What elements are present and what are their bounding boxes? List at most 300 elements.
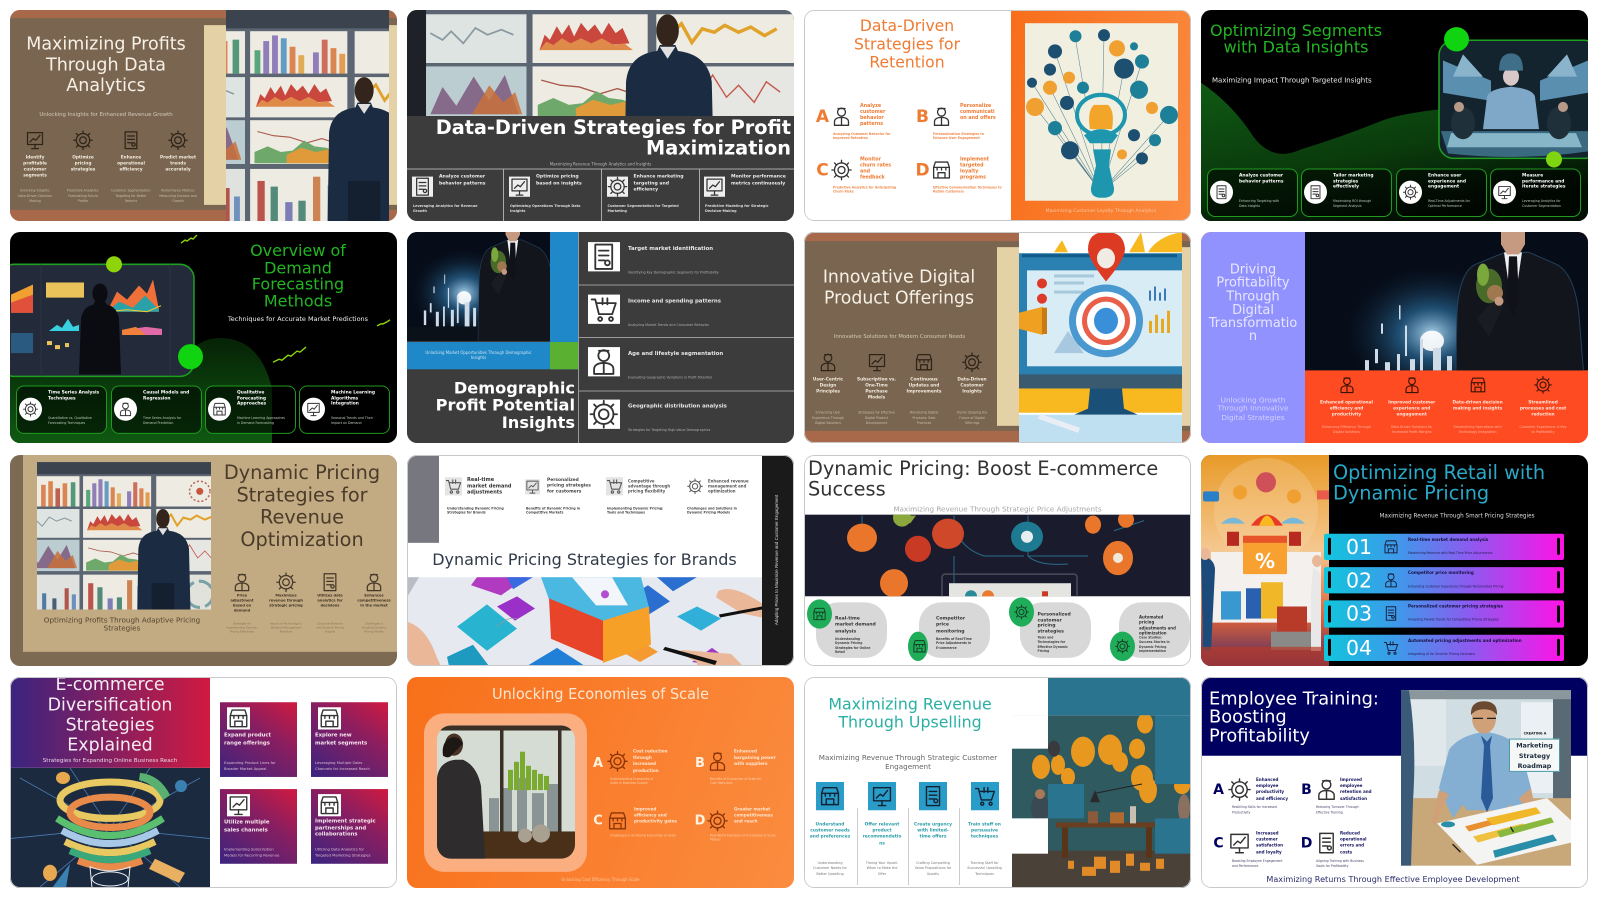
image caption subtitle: Strategies — [104, 624, 140, 633]
slide: E-commerce Diversification Strategies Explained — [10, 677, 397, 888]
title — [854, 17, 960, 72]
title: Demand — [264, 258, 332, 277]
item: monitor performance: Decision-Making — [705, 209, 737, 213]
item: measure performance: Customer Segmentation — [1522, 204, 1561, 208]
item: analyze behavior: Growth — [413, 209, 427, 213]
item A: Reskilling Skills for Increased — [1232, 805, 1277, 809]
item: analyze behavior: Enhancing Targeting with — [1239, 199, 1279, 203]
bar 03: 03 — [1346, 601, 1372, 626]
title: Overview of — [250, 241, 346, 260]
item: identify segments — [18, 132, 52, 202]
item: operational efficiency: productivity — [1332, 413, 1361, 418]
item: age segmentation: Age and lifestyle segmentation — [628, 351, 723, 357]
item: geographic distribution: Strategies for Targeting High-Value Demographics — [628, 428, 710, 432]
title: Forecasting — [252, 275, 344, 294]
accent circle: lime — [106, 256, 122, 272]
item: competitor monitoring: price — [936, 623, 949, 628]
item A: Productivity — [1232, 810, 1250, 814]
item: measure performance: Leveraging Analytics for — [1522, 199, 1561, 203]
item: competitor monitoring — [919, 597, 1019, 662]
label box: Marketing — [1516, 742, 1553, 750]
item: measure performance — [1490, 169, 1580, 216]
item B: on and offers — [960, 116, 996, 121]
item A: Scale in Business Growth — [610, 781, 648, 785]
item: time series — [16, 385, 106, 433]
item D: Models — [710, 838, 721, 842]
item: continuous updates: Monetizing Digital — [910, 411, 938, 415]
title: Optimization — [240, 528, 364, 551]
title — [1210, 21, 1382, 56]
title: Product Offerings — [824, 288, 974, 308]
item: optimize pricing: Profits — [78, 198, 88, 202]
item: maximize revenue: strategic pricing — [269, 603, 303, 607]
item: target market: Target market identification — [628, 246, 713, 252]
item C: Predictive Analytics for Anticipating — [833, 186, 896, 190]
tile: sales channels: Models for Recurring Revenue — [224, 853, 279, 857]
item: real-time demand: Retail — [835, 650, 845, 654]
tile: partnerships — [311, 789, 388, 864]
item: identify segments: profitable — [23, 161, 47, 166]
item: urgency: Value Propositions for — [915, 866, 951, 870]
item: subscription: One-Time — [865, 383, 888, 388]
title: Maximizing Revenue — [828, 694, 992, 713]
title: Dynamic Pricing — [224, 461, 380, 484]
item D: Effective Communication Techniques to — [933, 186, 1002, 190]
item B: with suppliers — [734, 761, 767, 766]
item: recommendations: recommendatio — [863, 835, 901, 840]
tile: partnerships: Targeted Marketing Strategies — [315, 853, 371, 857]
item B: Enhance User Engagement — [933, 136, 980, 140]
item: real-time demand: Real-time — [835, 617, 860, 622]
item: subscription: Purchase — [865, 389, 888, 395]
title: Dynamic Pricing — [1333, 481, 1489, 504]
item C: churn rates — [860, 163, 891, 169]
item: enhance marketing: Customer Segmentation for Targeted — [608, 204, 679, 208]
item: predict trends: Performance Metrics: — [161, 189, 195, 193]
item: data-driven decisions: Technology Integration — [1459, 430, 1496, 434]
item: subscription: Models — [868, 396, 885, 401]
item: subscription — [857, 354, 896, 424]
item B: Benefits of Economies of Scale for — [710, 777, 761, 781]
title: Driving — [1230, 262, 1276, 277]
item B: B — [1301, 782, 1312, 798]
item: automated adjustments: Case Studies: — [1139, 636, 1162, 640]
item: competitor monitoring: E-commerce — [936, 645, 957, 649]
item: real-time — [445, 477, 521, 516]
item C: and — [860, 170, 870, 175]
item: enhance experience: engagement — [1428, 185, 1459, 190]
tile: partnerships: Utilizing Data Analytics for — [315, 847, 364, 851]
title: Diversification — [48, 695, 172, 715]
item: recommendations: When to Make the — [867, 866, 897, 870]
title: Optimizing Segments — [1210, 21, 1382, 40]
item: time series: Quantitative vs. Qualitative — [48, 416, 92, 420]
item: analyze behavior: behavior patterns — [439, 181, 486, 186]
item: optimize pricing: Predictive Analytics: — [67, 189, 99, 193]
title — [1333, 463, 1583, 504]
tile: expand range: Expanding Product Lines for — [224, 760, 276, 764]
item A: Analyze — [860, 104, 881, 109]
item: competitiveness: Adopting Dynamic — [362, 626, 386, 630]
slide: Unlocking Economies of Scale: Greater market — [734, 806, 770, 811]
item: user-centric design: User-Centric — [813, 377, 843, 382]
subtitle: Techniques for Accurate Market Predictions — [228, 315, 368, 323]
item: analyze behavior: Analyze customer — [1239, 174, 1283, 179]
slide: Unlocking Economies of Scale: bargaining power — [734, 755, 776, 760]
item: competitor monitoring: Benefits of Real-Time — [936, 637, 972, 641]
title: Profit Potential — [436, 396, 575, 415]
item: competitiveness — [353, 571, 395, 638]
item: data analytics: Consumer Behavior — [317, 622, 343, 626]
title: Explained — [67, 736, 153, 756]
item D: errors and — [1340, 843, 1364, 848]
slide: Employee Training: Boosting Profitability — [1201, 677, 1588, 888]
item: train staff: techniques — [971, 835, 998, 840]
item: competitor monitoring: monitoring — [936, 629, 965, 635]
image: man viewing data charts — [37, 462, 211, 609]
slide: Maximizing Profits Through Data Analytics — [10, 10, 397, 221]
item: maximize revenue — [265, 571, 307, 638]
item: competitiveness: in the market — [360, 603, 388, 607]
item: understand needs: and preferences — [810, 835, 850, 840]
label kicker: CREATING A — [1524, 732, 1546, 736]
label box: Roadmap — [1518, 762, 1551, 770]
item A — [1210, 777, 1305, 819]
bar 02 — [1324, 567, 1564, 593]
item: operational efficiency: Enhanced operational — [1320, 401, 1373, 406]
item C: customer — [1256, 837, 1278, 842]
item D: D — [1301, 836, 1312, 852]
vertical caption: Adapting Prices to Maximize Revenue and Customer Engagement — [774, 495, 779, 625]
item: revenue management — [687, 477, 763, 516]
item: qualitative approaches: Machine Learning Approaches — [237, 416, 285, 420]
teal backdrop block — [1048, 677, 1191, 715]
title: Innovative Digital — [823, 267, 975, 288]
item: monitor performance: Monitor performance — [731, 175, 786, 180]
item: continuous updates: Products: Best — [913, 416, 935, 420]
item: revenue management: management and — [708, 483, 746, 488]
subtitle: Through Innovative — [1218, 404, 1288, 413]
subtitle: Engagement — [885, 761, 931, 770]
item: customer experience: Data-Driven Solutions for — [1391, 425, 1433, 429]
label box — [1509, 739, 1560, 772]
item: time series: Time Series Analysis — [48, 391, 99, 396]
title — [436, 378, 575, 432]
item: price adjustment: Price — [237, 593, 247, 597]
title: Demographic — [454, 378, 575, 398]
item D: D — [915, 160, 930, 181]
item: optimize pricing — [67, 130, 99, 202]
item: data analytics: analytics for — [317, 598, 343, 602]
item D: loyalty — [960, 170, 978, 175]
item: real-time: Understanding Dynamic Pricing — [447, 506, 504, 511]
slide: Data-Driven Strategies for Profit Maximization — [407, 10, 794, 221]
item: customer experience: Increased Profit Margins — [1392, 430, 1432, 434]
item: urgency: Upsells — [927, 872, 939, 876]
slide: Dynamic Pricing: Boost E-commerce Success — [804, 455, 1191, 666]
item: data-driven insights — [956, 352, 988, 424]
item: price adjustment: based on — [233, 603, 251, 607]
item D: programs — [960, 176, 986, 181]
item: streamlined processes: Streamlined — [1528, 401, 1558, 406]
navy header band — [1201, 677, 1588, 756]
slide: Unlocking Economies of Scale: through — [633, 755, 652, 760]
item: streamlined processes: Customer Experience: A Key — [1520, 425, 1566, 429]
item B: retention and — [1340, 789, 1372, 795]
accent circle: bright green — [178, 344, 203, 369]
item: personalized pricing: pricing strategies — [547, 484, 591, 489]
item: optimize pricing: based on insights — [536, 181, 582, 186]
item: automated adjustments: Dynamic Pricing — [1139, 644, 1166, 648]
item: revenue management: Enhanced revenue — [708, 478, 749, 483]
item: competitive advantage: advantage through — [628, 483, 670, 488]
item: understand needs — [805, 778, 855, 885]
item: analyze behavior: behavior patterns — [1239, 179, 1283, 184]
item: train staff: Techniques — [975, 872, 994, 876]
item: recommendations: product — [872, 829, 892, 834]
item: income patterns: Income and spending patterns — [628, 299, 721, 305]
item C: C — [593, 813, 603, 828]
image frame — [424, 713, 587, 872]
slide: Unlocking Economies of Scale — [407, 677, 794, 888]
item: tailor marketing: Maximizing ROI through — [1333, 199, 1371, 203]
slide: Data-Driven Strategies for Retention — [804, 10, 1191, 221]
item: revenue management: Dynamic Pricing Models — [687, 511, 730, 515]
item D: Retain Customers — [933, 190, 964, 194]
green glow background — [10, 338, 272, 443]
item: personalized strategies: Technologies for — [1038, 640, 1065, 644]
item: personalized strategies — [1020, 597, 1120, 662]
image: monitor with target and pin — [1019, 232, 1182, 443]
item: machine learning: Impact on Demand — [331, 421, 362, 425]
item: time series: Forecasting Techniques — [48, 421, 85, 425]
item: optimize pricing: Forecasting Future — [68, 194, 98, 198]
item D: Aligning Training with Business — [1316, 859, 1364, 863]
item: maximize revenue: revenue through — [269, 598, 303, 602]
item C — [591, 817, 686, 860]
item: subscription: Development — [866, 420, 887, 424]
item: monitor performance — [704, 174, 786, 213]
image: orange balloons meeting room — [1012, 715, 1191, 888]
title — [10, 675, 210, 756]
item: recommendations: Offer relevant — [865, 822, 899, 827]
tile: partnerships: Implement strategic — [315, 818, 376, 824]
item A — [816, 103, 891, 140]
item: maximize revenue: Revenue Management — [271, 626, 301, 630]
item: continuous updates: Practices — [917, 420, 931, 424]
image: circuit of marketing icons — [804, 515, 1191, 596]
slide: Unlocking Economies of Scale: Enhanced — [734, 749, 757, 754]
tile: expand range: Expand product — [224, 733, 271, 739]
title: Strategies for — [236, 483, 368, 506]
item: streamlined processes — [1511, 375, 1575, 440]
item: continuous updates — [906, 354, 942, 424]
tile: sales channels — [220, 789, 297, 864]
title: Data-Driven — [860, 17, 954, 35]
subtitle: Maximizing Revenue Through Strategic Customer — [819, 753, 997, 762]
title: Methods — [264, 291, 332, 311]
item: train staff: Train staff on — [968, 822, 1001, 827]
item: predict trends: trends — [170, 161, 186, 166]
item C: and Performance — [1232, 864, 1258, 868]
slide: Unlocking Economies of Scale: efficiency and — [634, 812, 667, 818]
item: recommendations — [857, 778, 907, 885]
item: personalized strategies: Pricing — [1038, 649, 1049, 653]
item: data-driven insights: Offerings — [965, 420, 979, 424]
item: understand needs: Understand — [816, 822, 844, 827]
item B: communicati — [960, 110, 995, 115]
item D: D — [695, 813, 705, 828]
tile: partnerships: partnerships and — [315, 825, 366, 831]
item: identify segments: Data-Driven Decision — [18, 194, 52, 198]
item: personalized strategies: Effective Dynamic — [1038, 644, 1068, 648]
item: data-driven decisions: Data-driven decision — [1452, 401, 1503, 406]
item: competitiveness: Enhances — [364, 593, 384, 597]
subtitle: Maximizing Revenue Through Strategic Price Adjustments — [893, 504, 1102, 513]
title: Maximizing Profits — [26, 34, 186, 54]
item: analyze behavior — [1207, 169, 1298, 216]
footer subtitle: Maximizing Returns Through Effective Employee Development — [1266, 874, 1520, 884]
image: retail illustration: % — [1255, 549, 1275, 573]
item: data-driven insights: Trends Shaping the — [957, 411, 987, 415]
item: target market: Identifying Key Demographic Segments for Profitability — [628, 270, 719, 274]
bar 04: Automated pricing adjustments and optimization — [1408, 637, 1522, 642]
item D: Real-World Examples of Economies of Scale — [710, 833, 776, 838]
item: competitive advantage — [606, 477, 682, 516]
title: Data-Driven Strategies for Profit — [436, 116, 791, 139]
item: subscription: Subscription vs. — [857, 377, 896, 382]
bar 01 — [1324, 533, 1564, 560]
item: train staff — [960, 778, 1010, 885]
item: operational efficiency — [1314, 375, 1378, 440]
item: competitive advantage: Tools and Techniques — [607, 511, 645, 515]
bar 02: Enhancing Customer Experience through Personalized Pricing — [1408, 584, 1504, 588]
item: real-time demand: Understanding — [835, 637, 860, 641]
item: income patterns: Analyzing Market Trends and Consumer Behavior — [628, 323, 709, 327]
item: data analytics — [309, 571, 351, 638]
item: automated adjustments: pricing — [1139, 620, 1154, 625]
item B: B — [695, 756, 705, 771]
item: subscription: Digital Product — [865, 416, 888, 420]
item: user-centric design: Digital Solutions — [815, 420, 841, 424]
tile: new segments: market segments — [315, 741, 367, 747]
title: Through — [1226, 289, 1280, 304]
subtitle band: Insights — [471, 355, 486, 360]
item: competitive advantage: pricing flexibility — [628, 488, 665, 493]
item: income patterns — [588, 294, 721, 327]
title: Digital — [1232, 303, 1274, 318]
item: continuous updates: Improvements — [906, 389, 942, 395]
item: real-time: Strategies for Brands — [447, 511, 486, 515]
item: causal models: Demand Prediction — [143, 421, 173, 425]
title: Employee Training: — [1209, 688, 1379, 709]
item: automated adjustments — [1119, 597, 1219, 662]
tile: expand range: range offerings — [224, 741, 270, 747]
item: personalized pricing: Benefits of Dynamic Pricing in — [526, 506, 580, 511]
item: tailor marketing: Tailor marketing — [1333, 174, 1373, 179]
item: competitive advantage: Implementing Dynamic Pricing: — [607, 506, 663, 511]
item: enhance experience: Optimal Performance — [1428, 204, 1462, 208]
item A: patterns — [860, 122, 883, 127]
item: enhance efficiency — [111, 131, 151, 202]
accent circle: lime — [1546, 151, 1562, 167]
item: train staff: Training Staff for — [970, 861, 999, 865]
item: optimize pricing: Optimize pricing — [536, 175, 579, 180]
item: optimize pricing: Optimize — [72, 155, 94, 160]
item C: Boosting Employee Engagement — [1232, 859, 1283, 863]
item: monitor performance: Predictive Modeling for Strategic — [705, 204, 769, 208]
item A: Analyzing Customer Behavior for — [833, 132, 891, 136]
slide: Driving Profitability Through Digital Transformation — [1201, 232, 1588, 443]
item: identify segments: customer — [24, 167, 46, 173]
item: recommendations: ns — [879, 841, 885, 846]
image: retail illustration — [1201, 455, 1329, 666]
item: causal models: Time Series Analysis for — [143, 416, 181, 420]
item C: Challenges in Achieving Economies of Scale — [610, 833, 676, 838]
footer subtitle: Maximizing Customer Loyalty Through Analytics — [1046, 209, 1156, 214]
item: measure performance: performance and — [1522, 179, 1564, 184]
item: subscription: Strategies for Effective — [858, 411, 895, 415]
item C: Churn Risks — [833, 190, 854, 194]
item: predict trends: Predict market — [160, 155, 196, 160]
title: Profitability — [1209, 725, 1310, 746]
title — [26, 34, 186, 96]
item: measure performance: iterate strategies — [1522, 185, 1565, 190]
image caption subtitle — [32, 617, 212, 633]
item: data analytics: and Dynamic Pricing — [316, 626, 344, 630]
title: Insights — [502, 413, 575, 432]
item C: and loyalty — [1256, 849, 1282, 854]
item: enhance efficiency: Customer Segmentation: — [111, 189, 151, 193]
item A — [591, 761, 686, 803]
item: personalized pricing: Personalized — [547, 478, 579, 483]
item: train staff: Successful Upselling — [967, 866, 1002, 870]
title — [807, 695, 1013, 732]
image: businessman with plant — [1305, 232, 1588, 370]
title: Success — [808, 477, 886, 500]
item: maximize revenue: Practices — [280, 630, 292, 634]
item B: employee — [1340, 783, 1362, 788]
slide: Unlocking Economies of Scale: Improved — [634, 806, 656, 811]
item: user-centric design: Principles — [816, 389, 840, 395]
item: personalized strategies: Personalized — [1038, 612, 1071, 618]
item: user-centric design: Experience Through — [812, 416, 844, 420]
image: man at a city window — [437, 725, 575, 859]
title: with Data Insights — [1224, 37, 1368, 56]
title — [1209, 690, 1399, 746]
item: time series: Techniques — [48, 396, 76, 401]
image: forecasting dashboard — [10, 264, 195, 378]
item: competitiveness: competitiveness — [357, 598, 391, 602]
item: competitive advantage: Competitive — [628, 478, 655, 483]
item: data-driven decisions — [1446, 375, 1510, 440]
item: maximize revenue: Maximizes — [275, 593, 297, 597]
subtitle: Maximizing Revenue Through Smart Pricing Strategies — [1379, 514, 1535, 520]
item: urgency: Crafting Compelling — [916, 861, 950, 865]
bar 01: Maximizing Revenue with Real-Time Price Adjustments — [1408, 550, 1492, 554]
item A: customer — [860, 110, 885, 115]
grey accent block — [407, 455, 439, 543]
item: machine learning: Seasonal Trends and Their — [331, 416, 373, 420]
item: competitiveness: Challenges in — [365, 622, 383, 626]
item: data-driven decisions: Streamlining Operations with — [1454, 425, 1502, 429]
slide: Innovative Digital Product Offerings — [804, 232, 1191, 443]
subtitle: Strategies for Expanding Online Business Reach — [43, 758, 177, 764]
orange side panel — [1011, 10, 1191, 221]
tile: new segments: Channels for Increased Reach — [315, 766, 370, 770]
item: identify segments: segments — [23, 174, 47, 179]
tile: sales channels: sales channels — [224, 827, 268, 833]
